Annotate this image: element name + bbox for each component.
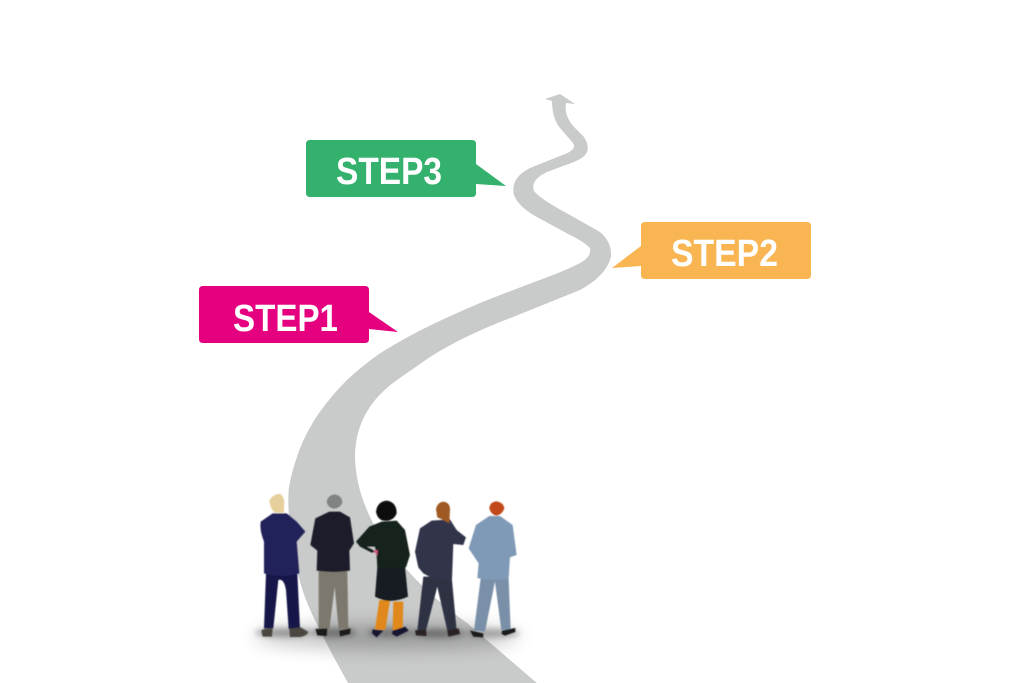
callout: STEP1	[199, 286, 398, 343]
callout: STEP3: STEP3	[336, 151, 442, 193]
figure 5: redhead man in light blue suit	[469, 501, 517, 637]
group of five figures	[253, 494, 520, 648]
callout: STEP2	[612, 222, 811, 279]
callout: STEP2: STEP2	[671, 233, 778, 275]
figure 4: man in dark suit with hand raised	[415, 502, 466, 637]
figure 3: woman in black skirt suit	[356, 501, 410, 637]
winding road with arrow	[288, 94, 611, 683]
callout: STEP1: STEP1	[233, 298, 338, 340]
figure 1: blond man in navy suit	[260, 494, 308, 637]
callout: STEP3	[306, 140, 506, 197]
figure 2: grey-haired man in dark jacket	[310, 494, 354, 636]
ground shadows	[253, 625, 520, 648]
